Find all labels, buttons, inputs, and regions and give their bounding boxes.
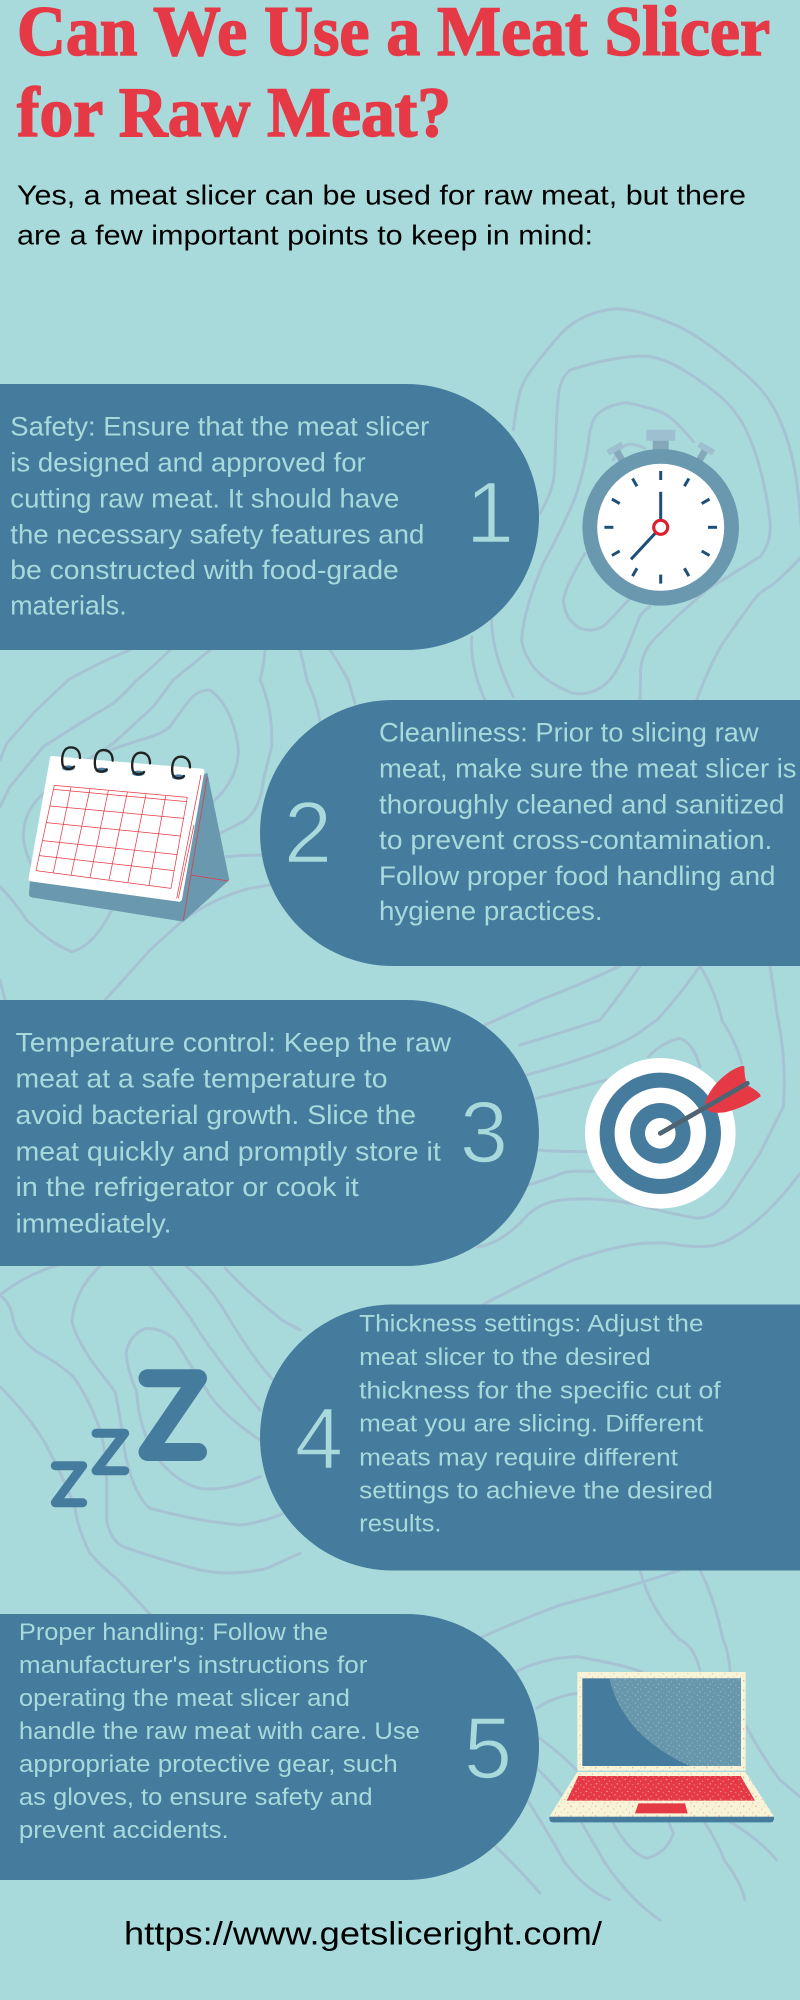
panel: step 1 safety: the necessary safety features and [10, 519, 424, 549]
panel: step 4 thickness settings: results. [359, 1511, 442, 1538]
panel: step 4 thickness settings: settings to achieve the desired [359, 1478, 713, 1505]
panel: step 2 cleanliness: Follow proper food handling and [379, 861, 776, 891]
panel: step 3 temperature control: meat quickly and promptly store it [16, 1136, 442, 1166]
panel: step 4 thickness settings: 4 [295, 1390, 343, 1487]
icon: target with arrow [585, 1058, 761, 1209]
panel: step 1 safety: 1 [466, 464, 514, 561]
icon: stopwatch [582, 430, 739, 606]
icon: desk calendar [29, 747, 229, 922]
panel: step 2 cleanliness: to prevent cross-contamination. [379, 825, 772, 855]
panel: step 1 safety: cutting raw meat. It should have [10, 484, 399, 514]
panel: step 5 proper handling: handle the raw meat with care. Use [19, 1718, 420, 1745]
title [17, 0, 770, 152]
panel: step 5 proper handling: prevent accidents. [19, 1817, 229, 1844]
panel: step 4 thickness settings [260, 1304, 800, 1570]
panel: step 5 proper handling: appropriate protective gear, such [19, 1751, 398, 1778]
website url: https://www.getsliceright.com/ [124, 1915, 602, 1951]
panel: step 4 thickness settings: meats may require different [359, 1444, 678, 1471]
panel: step 5 proper handling: manufacturer's instructions for [19, 1652, 367, 1679]
panel: step 3 temperature control: in the refrigerator or cook it [16, 1172, 360, 1202]
panel: step 1 safety: is designed and approved for [10, 448, 366, 478]
panel: step 4 thickness settings: meat slicer to the desired [359, 1344, 651, 1371]
panel: step 1 safety: materials. [10, 590, 127, 620]
panel: step 4 thickness settings: meat you are slicing. Different [359, 1411, 704, 1438]
panel: step 4 thickness settings: Thickness settings: Adjust the [359, 1311, 704, 1338]
panel: step 3 temperature control: meat at a safe temperature to [16, 1064, 388, 1094]
icon: sleeping zzz [55, 1378, 198, 1503]
panel: step 1 safety: Safety: Ensure that the meat slicer [10, 412, 430, 442]
panel: step 1 safety [0, 384, 539, 650]
panel: step 2 cleanliness: hygiene practices. [379, 896, 603, 926]
intro text: Yes, a meat slicer can be used for raw meat, but there [17, 180, 746, 210]
panel: step 3 temperature control: avoid bacterial growth. Slice the [16, 1100, 416, 1130]
panel: step 4 thickness settings: thickness for the specific cut of [359, 1377, 721, 1404]
panel: step 5 proper handling [0, 1614, 539, 1880]
panel: step 2 cleanliness: Cleanliness: Prior to slicing raw [379, 718, 760, 748]
panel: step 5 proper handling: Proper handling: Follow the [19, 1619, 328, 1646]
panel: step 5 proper handling: as gloves, to ensure safety and [19, 1784, 373, 1811]
panel: step 2 cleanliness: thoroughly cleaned and sanitized [379, 789, 784, 819]
panel: step 3 temperature control: 3 [460, 1084, 508, 1181]
intro text [17, 180, 746, 250]
panel: step 5 proper handling: 5 [464, 1700, 512, 1797]
panel: step 1 safety: be constructed with food-grade [10, 555, 399, 585]
panel: step 5 proper handling: operating the meat slicer and [19, 1685, 350, 1712]
panel: step 3 temperature control [0, 1000, 539, 1266]
panel: step 2 cleanliness [260, 700, 800, 966]
panel: step 3 temperature control: Temperature control: Keep the raw [16, 1028, 452, 1058]
intro text: are a few important points to keep in mind: [17, 220, 593, 250]
icon: laptop [549, 1672, 774, 1822]
panel: step 3 temperature control: immediately. [16, 1208, 172, 1238]
panel: step 2 cleanliness: meat, make sure the meat slicer is [379, 754, 796, 784]
panel: step 2 cleanliness: 2 [284, 784, 332, 881]
title: for Raw Meat? [17, 74, 451, 152]
